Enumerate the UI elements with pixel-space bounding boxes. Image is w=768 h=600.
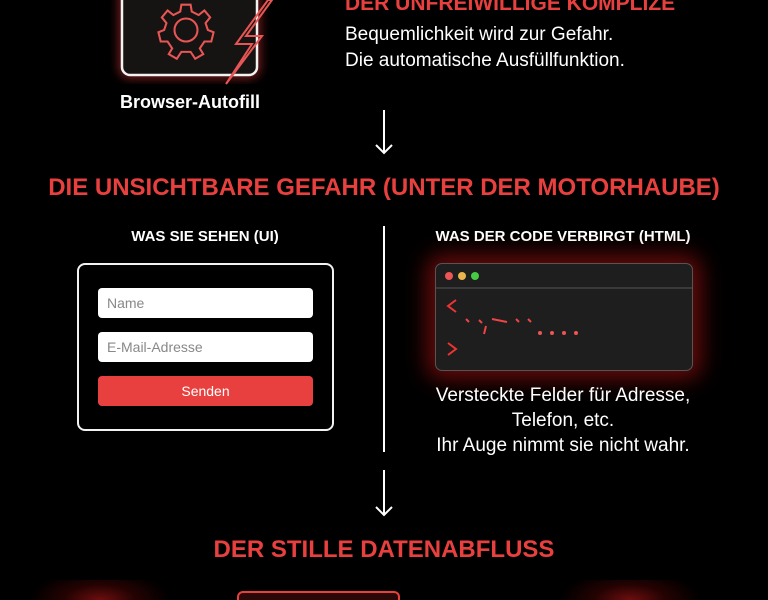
button: senden xyxy=(98,376,313,406)
label: Browser-Autofill: Browser-Autofill xyxy=(120,92,260,112)
heading: datenabfluss: DER STILLE DATENABFLUSS xyxy=(214,536,554,563)
icon: browser autofill xyxy=(112,0,274,85)
subheading: HTML: WAS DER CODE VERBIRGT (HTML) xyxy=(436,228,690,245)
text: komplize description: Die automatische Ausfüllfunktion. xyxy=(345,50,625,71)
heading: unsichtbare gefahr: DIE UNSICHTBARE GEFAHR (UNTER DER MOTORHAUBE) xyxy=(48,174,720,201)
input: email xyxy=(98,332,313,362)
bottom glow right xyxy=(560,580,700,600)
text: versteckte felder xyxy=(436,385,690,456)
panel: code window xyxy=(435,263,693,371)
text: komplize description: Bequemlichkeit wird zur Gefahr. xyxy=(345,24,613,45)
arrow 1 xyxy=(375,110,393,154)
panel: form mockup xyxy=(77,263,334,431)
bottom glow left xyxy=(30,580,170,600)
text: versteckte felder: Versteckte Felder für Adresse, xyxy=(436,385,690,406)
input: name xyxy=(98,288,313,318)
input: name: Name xyxy=(107,295,144,311)
arrow 2 xyxy=(375,470,393,516)
input: email: E-Mail-Adresse xyxy=(107,339,203,355)
bottom box xyxy=(237,591,400,600)
text: komplize description xyxy=(345,24,625,71)
subheading: UI: WAS SIE SEHEN (UI) xyxy=(131,228,279,245)
text: versteckte felder: Ihr Auge nimmt sie nicht wahr. xyxy=(436,435,690,456)
text: versteckte felder: Telefon, etc. xyxy=(512,410,614,431)
button: senden: Senden xyxy=(181,383,230,399)
